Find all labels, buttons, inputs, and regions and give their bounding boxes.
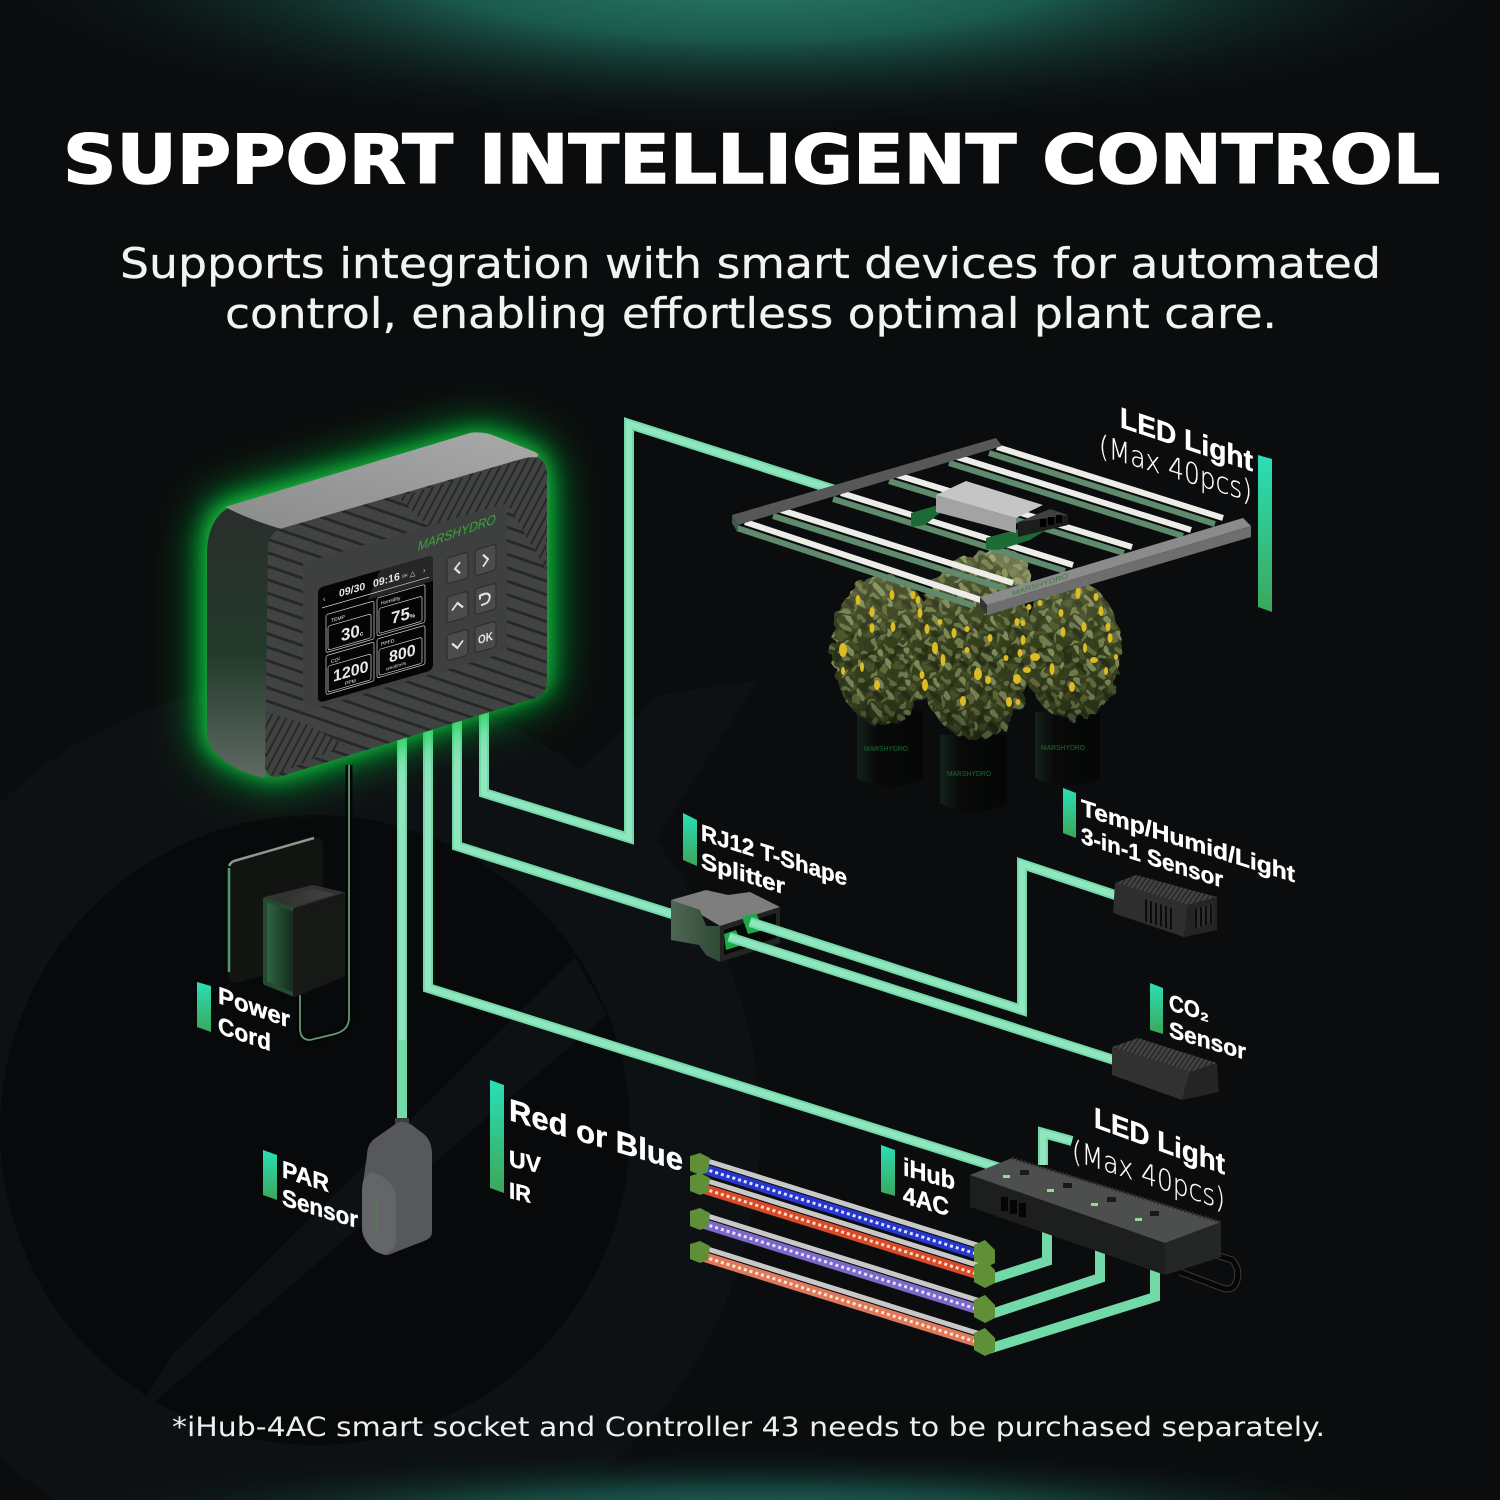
touch screen: CO²	[331, 657, 340, 665]
plant pots	[857, 710, 1100, 812]
touch screen: PPFD	[381, 638, 395, 648]
label: CO2 sensor: Sensor	[1169, 1016, 1246, 1065]
controller	[205, 432, 549, 779]
connection pipes	[402, 424, 1155, 1350]
power cord	[300, 765, 349, 1040]
foliage	[832, 548, 1121, 740]
label: power cord: Cord	[218, 1013, 271, 1057]
front frame bar	[980, 518, 1251, 605]
driver box	[936, 481, 1043, 533]
label: iHub 4AC	[881, 1145, 955, 1222]
label: 3-in-1 sensor: 3-in-1 Sensor	[1081, 823, 1223, 893]
power adapter	[228, 838, 343, 995]
splitter output pipes	[729, 864, 1118, 1060]
controller top face	[225, 432, 538, 530]
brand logo: MARSHYDRO	[416, 510, 498, 554]
label: LED light via iHub: (Max 40pcs)	[1072, 1134, 1225, 1218]
subtitle: control, enabling effortless optimal plant care.	[225, 289, 1277, 338]
touch screen: 75%	[391, 601, 416, 628]
label: RJ12 splitter: Splitter	[701, 848, 785, 899]
RJ12 splitter	[671, 890, 780, 962]
touch screen: Humidity	[381, 595, 401, 607]
socket holes	[1020, 1170, 1159, 1216]
top glow	[0, 0, 1500, 200]
rear frame bar	[732, 438, 1002, 525]
bottom glow	[0, 1400, 1500, 1500]
label: power cord: Power	[218, 983, 290, 1034]
label: light strips	[490, 1080, 683, 1208]
temp humidity light sensor	[1113, 875, 1217, 937]
touch screen: 1200	[333, 658, 369, 686]
watermark logo	[0, 679, 760, 1500]
subtitle: Supports integration with smart devices for automated	[120, 239, 1381, 288]
label: LED light	[1099, 402, 1272, 612]
control buttons	[447, 544, 496, 661]
light strip: pink	[690, 1241, 995, 1356]
PAR sensor	[362, 1118, 432, 1255]
label: LED light: (Max 40pcs)	[1099, 428, 1252, 509]
iHub 4AC power strip	[970, 1158, 1238, 1289]
LED grow light	[732, 438, 1251, 615]
touch screen: 09/30	[339, 581, 365, 600]
controller side face	[207, 503, 285, 778]
socket indicators	[1003, 1175, 1142, 1221]
label: PAR sensor	[263, 1150, 358, 1234]
label: LED light: LED Light	[1120, 402, 1253, 478]
label: light strips: Red or Blue	[509, 1092, 683, 1178]
subtitle	[120, 239, 1381, 338]
touch screen	[318, 555, 433, 703]
label: iHub 4AC: 4AC	[903, 1181, 949, 1222]
driver mounts	[911, 505, 1068, 550]
touch screen: △	[410, 569, 416, 579]
strip ports	[1001, 1197, 1026, 1217]
light strip: purple	[690, 1208, 995, 1323]
touch screen: TEMP	[331, 614, 345, 624]
light strip: blue	[690, 1153, 995, 1268]
yellow flowers	[839, 587, 1118, 707]
touch screen: PPM	[345, 678, 356, 687]
light bars	[737, 447, 1223, 606]
label: RJ12 splitter: RJ12 T-Shape	[701, 820, 847, 891]
label: 3-in-1 sensor: Temp/Humid/Light	[1081, 795, 1295, 887]
label: CO2 sensor	[1150, 983, 1246, 1065]
touch screen: 30c	[341, 619, 364, 645]
label: power cord	[197, 982, 290, 1057]
label: CO2 sensor: CO₂	[1169, 989, 1209, 1026]
control box with ports	[1018, 509, 1068, 537]
touch screen: OK	[402, 572, 408, 579]
label: PAR sensor: Sensor	[282, 1184, 358, 1234]
footnote: *iHub-4AC smart socket and Controller 43 needs to be purchased separately.	[172, 1412, 1325, 1443]
title: SUPPORT INTELLIGENT CONTROL	[63, 121, 1440, 200]
pot branding: MARSHYDRO	[864, 744, 908, 753]
control buttons: OK	[478, 629, 493, 647]
plants	[832, 548, 1121, 812]
label: light strips: IR	[509, 1177, 531, 1208]
controller front face	[265, 457, 547, 777]
fixture logo: MARSHYDRO	[1012, 572, 1069, 598]
touch screen: ‹	[323, 595, 326, 604]
touch screen: 800	[389, 641, 416, 667]
pot branding	[864, 743, 1085, 778]
pot branding: MARSHYDRO	[947, 769, 991, 778]
touch screen: 09:16	[373, 571, 400, 590]
touch screen: umol/m²/s	[386, 661, 407, 671]
light strip: red	[690, 1173, 995, 1288]
CO2 sensor	[1112, 1038, 1219, 1100]
label: light strips: UV	[509, 1145, 541, 1178]
label: iHub 4AC: iHub	[903, 1153, 955, 1196]
controller glow	[205, 433, 549, 779]
label: LED light via iHub	[1072, 1102, 1225, 1218]
label: LED light via iHub: LED Light	[1094, 1102, 1225, 1181]
touch screen: ›	[423, 566, 426, 575]
label: PAR sensor: PAR	[282, 1157, 329, 1198]
pot branding: MARSHYDRO	[1041, 743, 1085, 752]
